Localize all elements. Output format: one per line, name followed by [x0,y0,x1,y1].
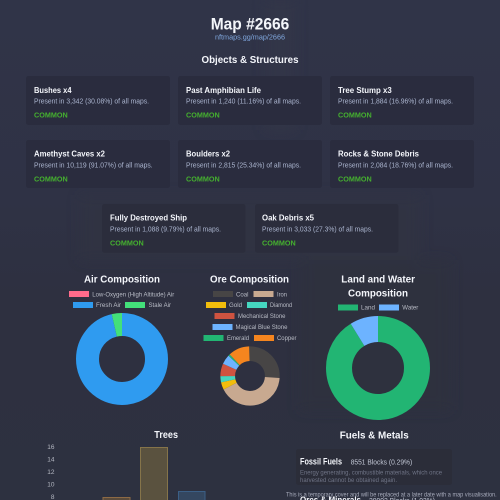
card: amethyst caves [26,140,170,188]
card: fossil fuels: Energy generating, combustible materials, which once [300,469,442,476]
legend: ore: Emerald [227,336,249,342]
heading: trees: Trees [154,429,178,441]
card: oak debris [255,204,398,253]
heading: ore composition: Ore Composition [210,274,289,286]
card: oak debris: COMMON [262,238,296,247]
heading: land and water composition [341,274,415,300]
card: boulders [178,140,322,188]
card: tree stump [330,76,474,125]
card: past amphibian life: Past Amphibian Life [186,85,261,95]
card: tree stump: Present in 1,884 (16.96%) of all maps. [338,98,453,106]
card: bushes: Present in 3,342 (30.08%) of all maps. [34,98,149,106]
bar: yellow [140,448,168,500]
bar: blue [178,492,205,500]
card: past amphibian life: Present in 1,240 (11.16%) of all maps. [186,98,301,106]
source link: nftmaps.gg/map/2666 [215,34,285,42]
legend: air [69,291,174,309]
card: amethyst caves: Present in 10,119 (91.07%) of all maps. [34,163,153,170]
card: bushes: Bushes x4 [34,85,72,95]
legend: ore: Copper [277,336,296,342]
card: bushes: COMMON [34,110,68,119]
y axis labels: 14 [47,456,55,464]
panel: land and water composition [338,274,418,407]
card: boulders: Present in 2,815 (25.34%) of all maps. [186,163,301,170]
bar: orange [103,498,130,500]
heading: air composition: Air Composition [84,274,160,286]
legend: ore: Diamond [270,303,292,309]
legend: air: Low-Oxygen (High Altitude) Air [92,292,174,298]
panel: air composition [69,274,174,394]
donut chart: ore [228,354,272,398]
card: ores and minerals [300,495,435,500]
card: fully destroyed ship: COMMON [110,238,144,247]
legend: land and water: Water [402,306,418,312]
card: bushes [26,76,170,125]
card: boulders: Boulders x2 [186,149,230,159]
legend: air: Fresh Air [96,303,121,309]
card: rocks and stone debris: Rocks & Stone Debris [338,149,419,159]
y axis labels: 16 [47,444,55,451]
legend: land and water: Land [361,306,375,312]
card: fully destroyed ship: Fully Destroyed Ship [110,213,187,223]
card: tree stump: Tree Stump x3 [338,85,392,95]
panel: ore composition [204,274,296,398]
heading: fuels and metals: Fuels & Metals [340,430,409,442]
heading: land and water composition: Land and Water [341,274,415,286]
card: oak debris: Oak Debris x5 [262,213,314,223]
legend: ore: Iron [277,292,287,298]
legend: ore: Coal [236,292,248,298]
legend: ore: Magical Blue Stone [236,325,288,331]
heading: objects and structures: Objects & Structures [202,54,299,66]
card: tree stump: COMMON [338,110,372,119]
card: past amphibian life: COMMON [186,110,220,119]
legend: air: Stale Air [148,303,171,309]
card: fossil fuels: harvested cannot be obtained again. [300,477,397,484]
card: rocks and stone debris [330,140,474,188]
card: boulders: COMMON [186,174,220,183]
card: fossil fuels [296,449,452,485]
card: fossil fuels: Fossil Fuels [300,457,342,467]
y axis labels: 10 [47,482,55,488]
card: fully destroyed ship [102,204,246,253]
panel: trees bar chart [47,429,205,500]
donut chart: air [88,324,156,394]
card: rocks and stone debris: COMMON [338,174,372,183]
legend: ore [204,291,296,342]
card: rocks and stone debris: Present in 2,084 (18.76%) of all maps. [338,163,453,170]
legend: ore: Gold [229,303,242,309]
card: past amphibian life [178,76,322,125]
panel: fuels and metals [296,430,452,500]
donut chart: land and water [339,329,417,407]
legend: land and water [338,304,418,312]
card: fossil fuels: 8551 Blocks (0.29%) [351,460,412,467]
y axis labels [47,444,55,500]
heading: land and water composition: Composition [348,288,408,300]
card: amethyst caves: Amethyst Caves x2 [34,149,105,159]
title: Map #2666 [211,15,289,33]
card: amethyst caves: COMMON [34,174,68,183]
y axis labels: 12 [47,469,55,476]
card: fully destroyed ship: Present in 1,088 (9.79%) of all maps. [110,227,221,234]
card: oak debris: Present in 3,033 (27.3%) of all maps. [262,227,373,234]
legend: ore: Mechanical Stone [238,314,286,320]
